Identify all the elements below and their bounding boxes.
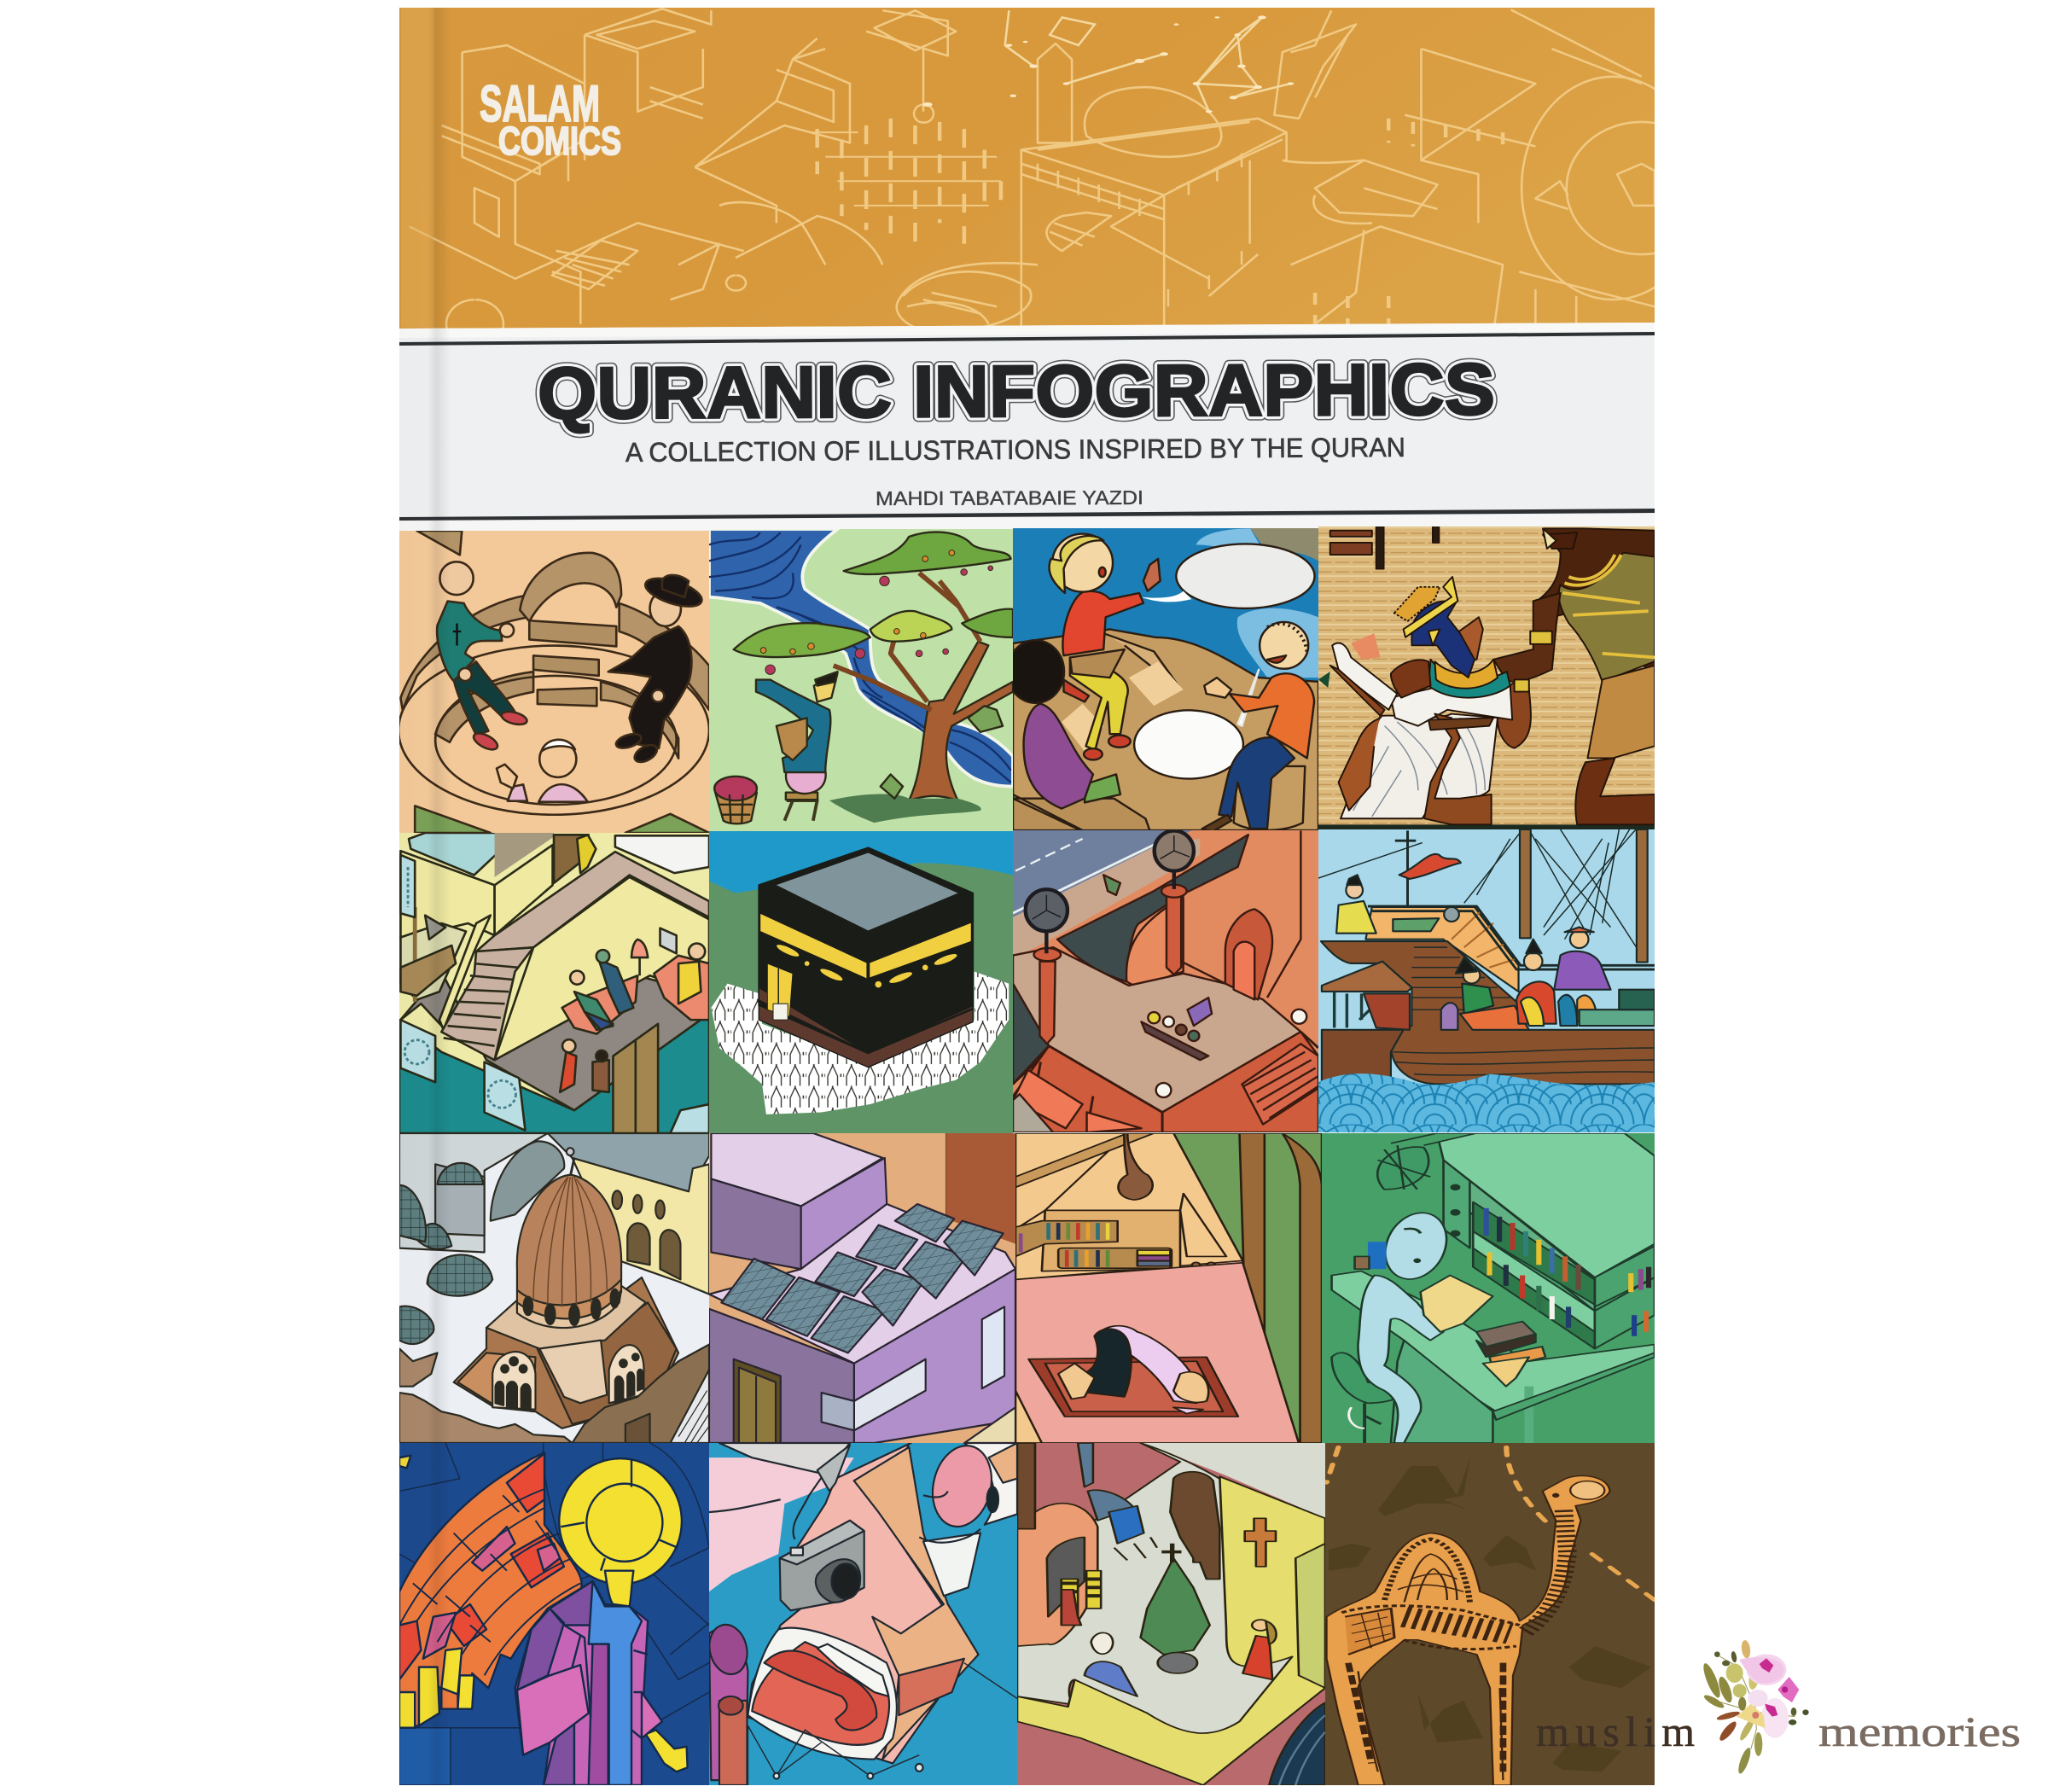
right man bbox=[608, 573, 705, 765]
camel patterning bbox=[1341, 1510, 1568, 1780]
robe bbox=[515, 1581, 648, 1785]
panel: solar roof bbox=[709, 1133, 1015, 1443]
stocking bbox=[1062, 1590, 1081, 1626]
eye bbox=[919, 1440, 1017, 1543]
panel: prayer room bbox=[1015, 1133, 1322, 1443]
purple tube bbox=[709, 1629, 748, 1780]
yellow wall + floor bbox=[1141, 1443, 1325, 1518]
boy bbox=[1202, 622, 1314, 831]
pit bbox=[399, 553, 709, 815]
windows bbox=[854, 1359, 926, 1430]
panel: white title band bbox=[399, 323, 1655, 531]
faint camels bbox=[1329, 1457, 1651, 1772]
wordmark: memories bbox=[1818, 1708, 2021, 1755]
angel bbox=[1242, 1620, 1277, 1679]
armchair bbox=[1170, 1472, 1219, 1580]
panel: river garden bbox=[709, 529, 1013, 831]
passengers bbox=[1336, 875, 1655, 1030]
man bbox=[1493, 528, 1655, 824]
subtitle: A COLLECTION OF ILLUSTRATIONS INSPIRED BY THE QURAN bbox=[625, 432, 1405, 468]
book cover background bbox=[399, 8, 1655, 1785]
constellation stars bbox=[1005, 10, 1290, 112]
stack of books bbox=[1476, 1322, 1545, 1387]
logo: Salam Comics: SALAM bbox=[480, 75, 600, 132]
kid bbox=[1007, 640, 1120, 809]
drum bbox=[517, 1271, 621, 1321]
farmer bbox=[756, 672, 838, 821]
forehead pink bbox=[709, 1457, 854, 1591]
chair bbox=[1332, 1353, 1405, 1403]
platform floor bbox=[1013, 947, 1300, 1112]
wire nodes bbox=[748, 1663, 1017, 1785]
grandmother bbox=[1085, 1632, 1137, 1696]
panel: face with camera eye bbox=[709, 1443, 1017, 1785]
title: QURANIC INFOGRAPHICS bbox=[538, 349, 1495, 434]
tree bbox=[734, 532, 1013, 800]
prayer mat bbox=[1028, 1357, 1238, 1417]
panel: orange line-art header bbox=[399, 8, 1655, 329]
shelves bbox=[1473, 1202, 1595, 1305]
bushes bbox=[829, 794, 981, 823]
stairs bbox=[441, 947, 533, 1060]
lamps bbox=[1292, 1009, 1306, 1024]
icon: floral bouquet bbox=[1701, 1639, 1809, 1775]
hull bbox=[1321, 941, 1655, 1084]
vacuum bbox=[1078, 1443, 1093, 1487]
panel: isometric home bbox=[399, 833, 709, 1133]
left man bbox=[437, 561, 528, 753]
river bbox=[709, 529, 1013, 787]
title: QURANIC INFOGRAPHICS bbox=[538, 349, 1495, 434]
tree bbox=[1141, 1544, 1210, 1673]
panel: decorated camel bbox=[1325, 1443, 1655, 1785]
student bbox=[1355, 1210, 1492, 1443]
fireplace bbox=[1017, 1443, 1097, 1646]
spine mottling bbox=[401, 8, 433, 328]
gray floor bbox=[400, 972, 709, 1110]
front door bbox=[613, 1024, 658, 1133]
panel: Egyptian papyrus bbox=[1318, 527, 1655, 829]
door bbox=[734, 1359, 781, 1443]
title: QURANIC INFOGRAPHICS bbox=[538, 349, 1495, 434]
kitchen bbox=[400, 923, 466, 1000]
nose cheek bbox=[748, 1443, 972, 1763]
bottom figure bbox=[497, 740, 588, 802]
jagged walls bbox=[399, 1393, 573, 1443]
fans bbox=[1026, 830, 1194, 953]
panel: Kaaba bbox=[709, 831, 1013, 1133]
dotted route bbox=[1327, 1447, 1655, 1600]
rainbow bbox=[399, 1452, 582, 1728]
wood pillars bbox=[1239, 1133, 1322, 1443]
roof bbox=[709, 1204, 1015, 1364]
bookshelves bbox=[1015, 1221, 1215, 1268]
rigging bbox=[1318, 829, 1644, 959]
camera bbox=[780, 1521, 864, 1610]
waves bbox=[1318, 1073, 1655, 1132]
panel: student at desk bbox=[1322, 1133, 1655, 1443]
fruit bbox=[760, 550, 993, 674]
prostrating figure bbox=[1058, 1326, 1208, 1414]
speech bubbles bbox=[1134, 544, 1315, 779]
queen bbox=[1330, 577, 1531, 824]
lattice panels bbox=[400, 855, 709, 1133]
panel: stained glass figure bbox=[399, 1443, 709, 1785]
panel: Christmas room bbox=[1017, 1443, 1325, 1785]
stern bbox=[1322, 962, 1411, 992]
small worshippers bbox=[1141, 998, 1212, 1060]
deck bbox=[1365, 907, 1519, 992]
panel: domed mosque bbox=[399, 1133, 709, 1443]
walkway bbox=[476, 852, 709, 951]
stair wall bbox=[495, 877, 709, 1060]
wordmark bbox=[1536, 1708, 2021, 1755]
author: MAHDI TABATABAIE YAZDI bbox=[876, 486, 1143, 509]
picture bbox=[660, 928, 677, 953]
watermark: muslim memories bbox=[1536, 1639, 2021, 1775]
panel: debate in a round pit bbox=[399, 531, 709, 833]
cross bbox=[1245, 1518, 1276, 1567]
teal base bbox=[399, 1014, 709, 1133]
camel bbox=[1327, 1475, 1610, 1785]
walls bbox=[709, 1309, 854, 1443]
logo: Salam Comics bbox=[480, 75, 621, 163]
family bbox=[560, 940, 705, 1092]
dark rug corner bbox=[1269, 1702, 1325, 1785]
logo: Salam Comics: COMICS bbox=[498, 119, 621, 163]
Kaaba bbox=[759, 847, 973, 1068]
panel: courtyard with fans bbox=[1013, 830, 1318, 1132]
panel: children in a discussion bbox=[1013, 528, 1318, 830]
lattice vents bbox=[1242, 1044, 1318, 1125]
columns bbox=[1039, 962, 1056, 1044]
pilgrim crowd bbox=[711, 972, 1009, 1114]
arched door bbox=[1225, 909, 1272, 999]
mouth bbox=[748, 1628, 897, 1760]
desk bbox=[1332, 1271, 1655, 1411]
panel: ship at sea bbox=[1318, 829, 1655, 1132]
solar panels bbox=[721, 1204, 1004, 1353]
lamp bbox=[1377, 1147, 1428, 1190]
spine shading bbox=[399, 8, 451, 1785]
base bbox=[454, 1277, 678, 1428]
sofas bbox=[562, 956, 709, 1034]
wordmark: muslim bbox=[1536, 1708, 1695, 1755]
sky bbox=[709, 831, 1013, 893]
girl bbox=[1050, 534, 1161, 759]
isometric line art bbox=[409, 9, 1717, 348]
basket bbox=[714, 777, 757, 823]
